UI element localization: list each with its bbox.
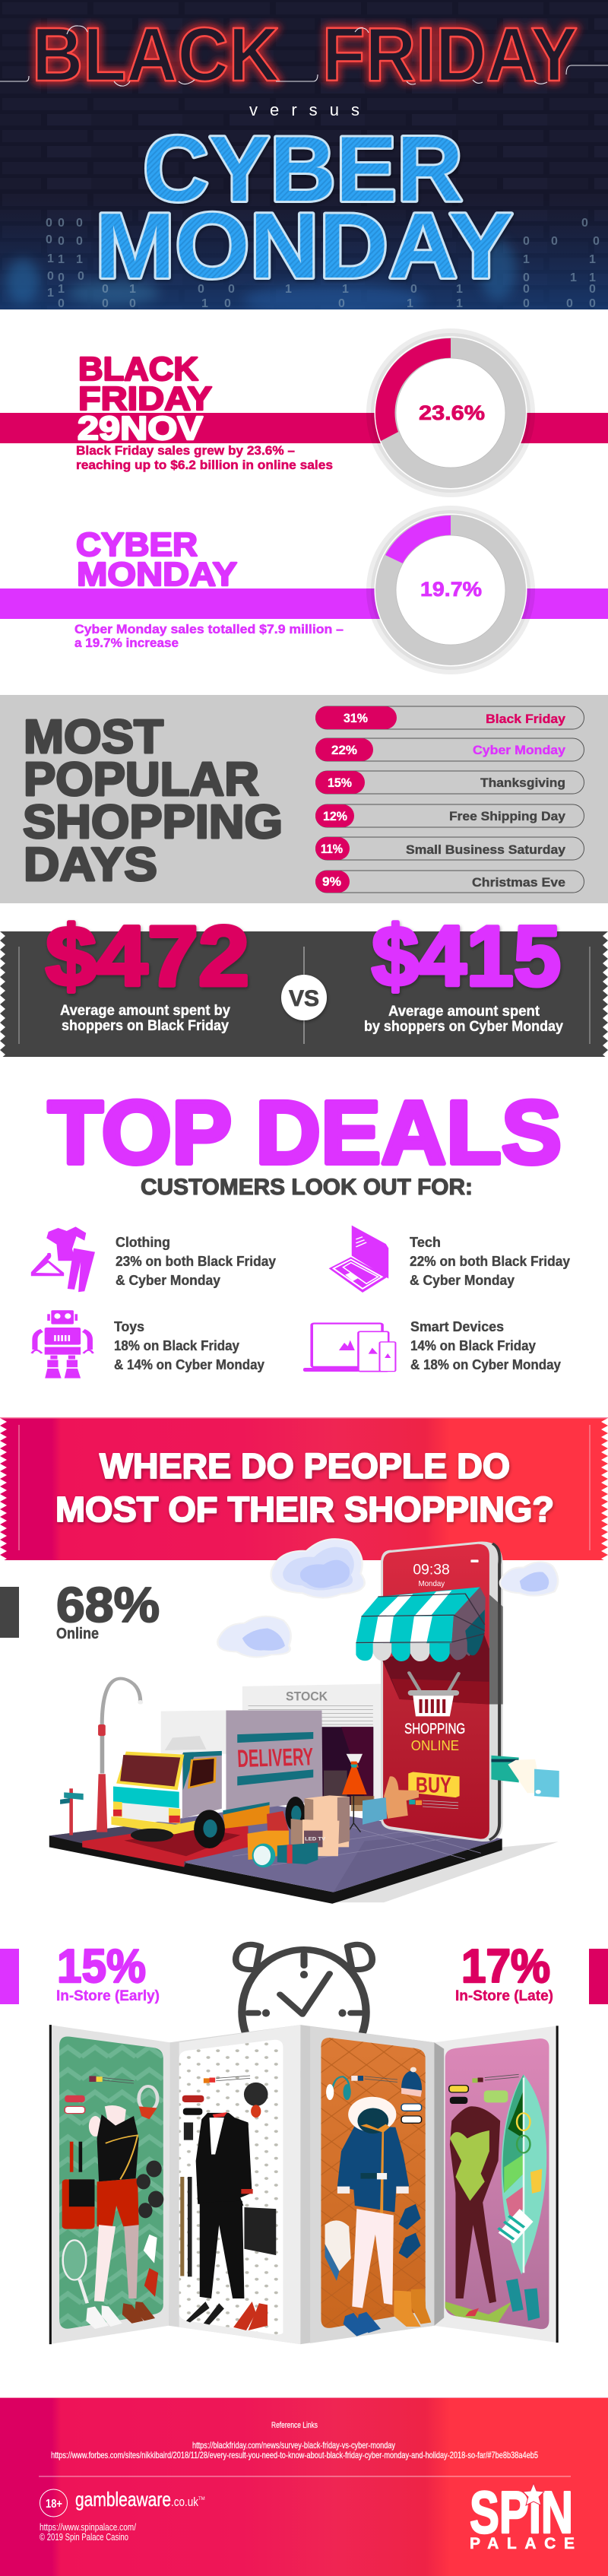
hand: holding card xyxy=(491,1756,559,1797)
binary rain: 0 xyxy=(47,270,54,283)
panel: average spend comparison xyxy=(0,909,608,1057)
banner: where do people shop xyxy=(0,1417,608,1560)
panel: formal wear xyxy=(179,2040,283,2334)
stat: 15% in-store early: In-Store (Early) xyxy=(56,1988,160,2004)
text: clothing: Clothing xyxy=(116,1235,170,1250)
stat: 15% in-store early xyxy=(0,1940,160,2004)
binary rain: 0 xyxy=(523,297,530,310)
text: tech xyxy=(410,1235,570,1288)
title: Cyber Monday: MONDAY xyxy=(95,194,513,297)
bar: Christmas Eve 9%: Christmas Eve xyxy=(472,875,565,890)
heading: Cyber Monday: MONDAY xyxy=(77,556,237,593)
title: Black Friday neon: FRIDAY xyxy=(322,12,578,97)
bar: Thanksgiving 15%: Thanksgiving xyxy=(480,776,565,790)
bar: Small Business Saturday 11%: Small Business Saturday xyxy=(406,842,566,857)
logo: Spin Palace: PALACE xyxy=(470,2535,575,2552)
binary rain xyxy=(46,217,600,310)
binary rain: 0 xyxy=(589,297,596,310)
basket xyxy=(408,1673,459,1716)
binary rain: 0 xyxy=(129,297,136,310)
title: Black Friday neon: FRIDAY xyxy=(322,12,578,97)
clouds xyxy=(217,1539,558,1657)
text: Cyber Monday description xyxy=(74,622,344,650)
heading: most popular shopping days: DAYS xyxy=(24,839,157,891)
delivery truck xyxy=(111,1710,322,1848)
binary rain: 0 xyxy=(523,283,530,296)
panel: hero header xyxy=(0,0,608,317)
signpost xyxy=(60,1788,84,1835)
donut chart: 19.7%: 19.7% xyxy=(420,578,482,601)
text: reference links: https://blackfriday.com/news/survey-black-friday-vs-cyber-monday xyxy=(192,2440,395,2451)
text: site and copyright: © 2019 Spin Palace Casino xyxy=(40,2532,128,2543)
display boards xyxy=(49,2025,559,2344)
heading: Cyber Monday xyxy=(76,526,237,593)
date: 29 Nov: 29NOV xyxy=(78,410,204,447)
bar: Black Friday 31% xyxy=(315,706,584,729)
binary rain: 0 xyxy=(58,235,65,248)
binary rain: 1 xyxy=(589,253,596,266)
donut chart: 19.7% xyxy=(366,506,535,674)
binary rain: 1 xyxy=(58,283,65,296)
stat: $415: $415 xyxy=(372,909,561,1004)
text: Cyber Monday average: by shoppers on Cyber Monday xyxy=(364,1019,563,1035)
bar: Free Shipping Day 12%: 12% xyxy=(323,809,347,823)
title: Black Friday neon: BLACK xyxy=(32,12,280,97)
heading: top deals: TOP DEALS xyxy=(48,1083,562,1183)
subheading: customers look out for: CUSTOMERS LOOK OUT FOR: xyxy=(141,1175,473,1200)
heading: question: MOST OF THEIR SHOPPING? xyxy=(55,1489,554,1529)
binary rain: 0 xyxy=(198,283,204,296)
text: smart devices: & 18% on Cyber Monday xyxy=(410,1357,561,1372)
text: Cyber Monday description: a 19.7% increase xyxy=(74,636,179,650)
text: Black Friday average xyxy=(60,1003,230,1034)
text: toys xyxy=(114,1319,264,1372)
binary rain: 1 xyxy=(58,253,65,266)
panel: footer xyxy=(0,2397,608,2576)
icon: laptop xyxy=(329,1226,388,1293)
badge: VS xyxy=(281,975,327,1020)
stat: 68% online: Online xyxy=(56,1626,99,1642)
text: smart devices xyxy=(410,1319,561,1372)
donut chart: 23.6%: 23.6% xyxy=(419,401,485,424)
panel: Cyber Monday sales xyxy=(0,506,608,674)
stat: $472: $472 xyxy=(46,909,249,1004)
text: clothing: 23% on both Black Friday xyxy=(116,1254,276,1269)
buy button xyxy=(408,1772,460,1809)
bar: Free Shipping Day 12%: Free Shipping Day xyxy=(449,809,566,823)
heading: Black Friday xyxy=(78,351,212,417)
text: reference links: Reference Links xyxy=(271,2421,318,2430)
text: Black Friday average: shoppers on Black Friday xyxy=(62,1018,229,1034)
logo: gambleaware 18+: 18+ xyxy=(46,2498,62,2511)
binary rain: 0 xyxy=(589,283,596,296)
bar: Cyber Monday 22%: 22% xyxy=(331,743,357,757)
binary rain: 0 xyxy=(523,271,530,284)
binary rain: 0 xyxy=(224,297,231,310)
binary rain: 1 xyxy=(589,271,596,284)
binary rain: 0 xyxy=(102,297,109,310)
binary rain: 0 xyxy=(76,217,83,230)
binary rain: 0 xyxy=(58,217,65,230)
panel: winter wear xyxy=(321,2038,431,2336)
binary rain: 1 xyxy=(523,253,530,266)
panel: sportswear xyxy=(59,2036,163,2329)
binary rain: 0 xyxy=(566,297,573,310)
bar: Black Friday 31%: 31% xyxy=(344,711,368,725)
warehouse: STOCK xyxy=(286,1690,328,1704)
text: reference links xyxy=(51,2421,538,2460)
binary rain: 1 xyxy=(47,252,54,265)
hand: pointing xyxy=(363,1776,419,1825)
text: Black Friday average: Average amount spent by xyxy=(60,1003,230,1019)
text: smart devices: Smart Devices xyxy=(410,1319,504,1334)
heading: most popular shopping days: POPULAR xyxy=(24,753,259,806)
heading: most popular shopping days: MOST xyxy=(24,711,163,763)
stat: 68% online xyxy=(0,1577,160,1642)
street lamp xyxy=(97,1679,143,1832)
binary rain: 1 xyxy=(570,271,577,284)
text: tech: 22% on both Black Friday xyxy=(410,1254,570,1269)
item: clothing xyxy=(31,1226,276,1292)
binary rain: 0 xyxy=(523,235,530,248)
ground shadow xyxy=(334,1842,559,1902)
binary rain: 0 xyxy=(551,235,558,248)
text: tech: Tech xyxy=(410,1235,441,1250)
panel: top deals xyxy=(31,1083,570,1378)
heading: question xyxy=(55,1446,554,1529)
binary rain: 0 xyxy=(593,235,600,248)
stat: 68% online: 68% xyxy=(56,1577,160,1632)
binary rain: 0 xyxy=(410,283,417,296)
text: Cyber Monday average: Average amount spent xyxy=(388,1004,540,1020)
logo: gambleaware 18+: TM xyxy=(198,2497,205,2501)
icon: alarm clock xyxy=(236,1944,372,2074)
illustration: in-store clock and display boards xyxy=(49,1944,559,2344)
stat: 17% in-store late: 17% xyxy=(461,1940,550,1993)
item: tech xyxy=(329,1226,570,1293)
icon: devices xyxy=(303,1324,395,1372)
bar: Thanksgiving 15% xyxy=(315,771,584,794)
panel: Black Friday sales xyxy=(0,328,608,497)
smartphone xyxy=(356,1541,503,1842)
heading: Cyber Monday: CYBER xyxy=(76,526,198,563)
warehouse xyxy=(242,1684,382,1811)
parcels xyxy=(248,1795,350,1867)
band xyxy=(0,588,608,619)
smartphone: Monday xyxy=(419,1578,445,1588)
mannequin dress xyxy=(342,1754,367,1832)
buy button: BUY xyxy=(416,1772,451,1797)
title: Cyber Monday xyxy=(99,134,515,283)
binary rain: 1 xyxy=(76,253,83,266)
binary rain: 0 xyxy=(46,217,52,230)
binary rain: 0 xyxy=(76,235,83,248)
logo: gambleaware 18+: .co.uk xyxy=(171,2495,198,2509)
text: Cyber Monday average xyxy=(364,1004,563,1035)
smartphone: SHOPPING xyxy=(404,1720,465,1737)
binary rain: 1 xyxy=(456,297,463,310)
title: Cyber Monday: CYBER xyxy=(143,117,463,220)
text: toys: 18% on Black Friday xyxy=(114,1338,239,1353)
binary rain: 0 xyxy=(58,271,65,284)
binary rain: 0 xyxy=(78,270,84,283)
smartphone: 09:38 xyxy=(413,1560,450,1578)
text: tech: & Cyber Monday xyxy=(410,1273,515,1288)
icon: robot xyxy=(32,1310,93,1378)
title: Black Friday neon xyxy=(0,18,608,90)
panel: most popular shopping days xyxy=(0,695,608,903)
illustration: online shopping delivery scene xyxy=(49,1541,559,1904)
item: toys xyxy=(32,1310,264,1378)
text: clothing: & Cyber Monday xyxy=(116,1273,220,1288)
logo: gambleaware 18+ xyxy=(40,2488,205,2517)
binary rain: 0 xyxy=(228,283,235,296)
stat: 17% in-store late xyxy=(455,1940,608,2004)
heading: Black Friday: FRIDAY xyxy=(78,380,212,417)
binary rain: 0 xyxy=(338,297,345,310)
binary rain: 0 xyxy=(46,233,52,246)
bar: Cyber Monday 22%: Cyber Monday xyxy=(473,743,566,757)
text: Black Friday description xyxy=(76,443,333,472)
smartphone: ONLINE xyxy=(411,1738,459,1753)
bar: Thanksgiving 15%: 15% xyxy=(328,776,352,790)
bar: Small Business Saturday 11%: 11% xyxy=(321,842,343,856)
text: site and copyright xyxy=(40,2522,136,2543)
text: Cyber Monday description: Cyber Monday sales totalled $7.9 million – xyxy=(74,622,344,636)
binary rain: 1 xyxy=(47,287,54,300)
bar: Black Friday 31%: Black Friday xyxy=(486,712,566,726)
text: smart devices: 14% on Black Friday xyxy=(410,1338,536,1353)
platform xyxy=(49,1805,502,1904)
parcels: LED TV xyxy=(305,1837,326,1842)
icon: clothing xyxy=(31,1226,95,1292)
band xyxy=(0,413,608,443)
bar: Cyber Monday 22% xyxy=(315,738,584,761)
bar: Small Business Saturday 11% xyxy=(315,837,584,860)
logo: Spin Palace: SPIN xyxy=(470,2479,573,2546)
delivery truck: DELIVERY xyxy=(236,1743,314,1772)
heading: most popular shopping days: SHOPPING xyxy=(23,796,283,849)
panel: beachwear xyxy=(445,2038,549,2329)
bar: Free Shipping Day 12% xyxy=(315,804,584,827)
text: toys: Toys xyxy=(114,1319,144,1334)
binary rain: 0 xyxy=(58,297,65,310)
heading: most popular shopping days xyxy=(23,711,283,891)
stat: 17% in-store late: In-Store (Late) xyxy=(455,1988,553,2004)
binary rain: 0 xyxy=(102,283,109,296)
binary rain: 0 xyxy=(581,217,588,230)
text: versus: versus xyxy=(249,100,359,119)
text: site and copyright: https://www.spinpalace.com/ xyxy=(40,2522,136,2533)
title: Black Friday neon: BLACK xyxy=(32,12,280,97)
binary rain: 1 xyxy=(201,297,208,310)
binary rain: 1 xyxy=(342,283,349,296)
text: toys: & 14% on Cyber Monday xyxy=(114,1357,264,1372)
donut chart: 23.6% xyxy=(366,328,535,497)
binary rain: 1 xyxy=(285,283,292,296)
badge: VS: VS xyxy=(289,986,319,1011)
bar chart: shopping days xyxy=(315,706,584,893)
road xyxy=(82,1826,249,1867)
item: smart devices xyxy=(303,1319,561,1372)
stat: 15% in-store early: 15% xyxy=(57,1940,146,1993)
bar: Christmas Eve 9%: 9% xyxy=(322,874,341,889)
text: Black Friday description: Black Friday sales grew by 23.6% – xyxy=(76,443,295,458)
binary rain: 1 xyxy=(129,283,136,296)
binary rain: 1 xyxy=(456,283,463,296)
text: Black Friday description: reaching up to $6.2 billion in online sales xyxy=(76,458,333,472)
bar: Christmas Eve 9% xyxy=(315,871,584,893)
awning xyxy=(356,1587,486,1662)
text: clothing xyxy=(116,1235,276,1288)
heading: question: WHERE DO PEOPLE DO xyxy=(100,1446,510,1486)
logo: gambleaware 18+: gambleaware xyxy=(75,2488,171,2511)
heading: Black Friday: BLACK xyxy=(78,351,198,388)
binary rain: 1 xyxy=(407,297,413,310)
